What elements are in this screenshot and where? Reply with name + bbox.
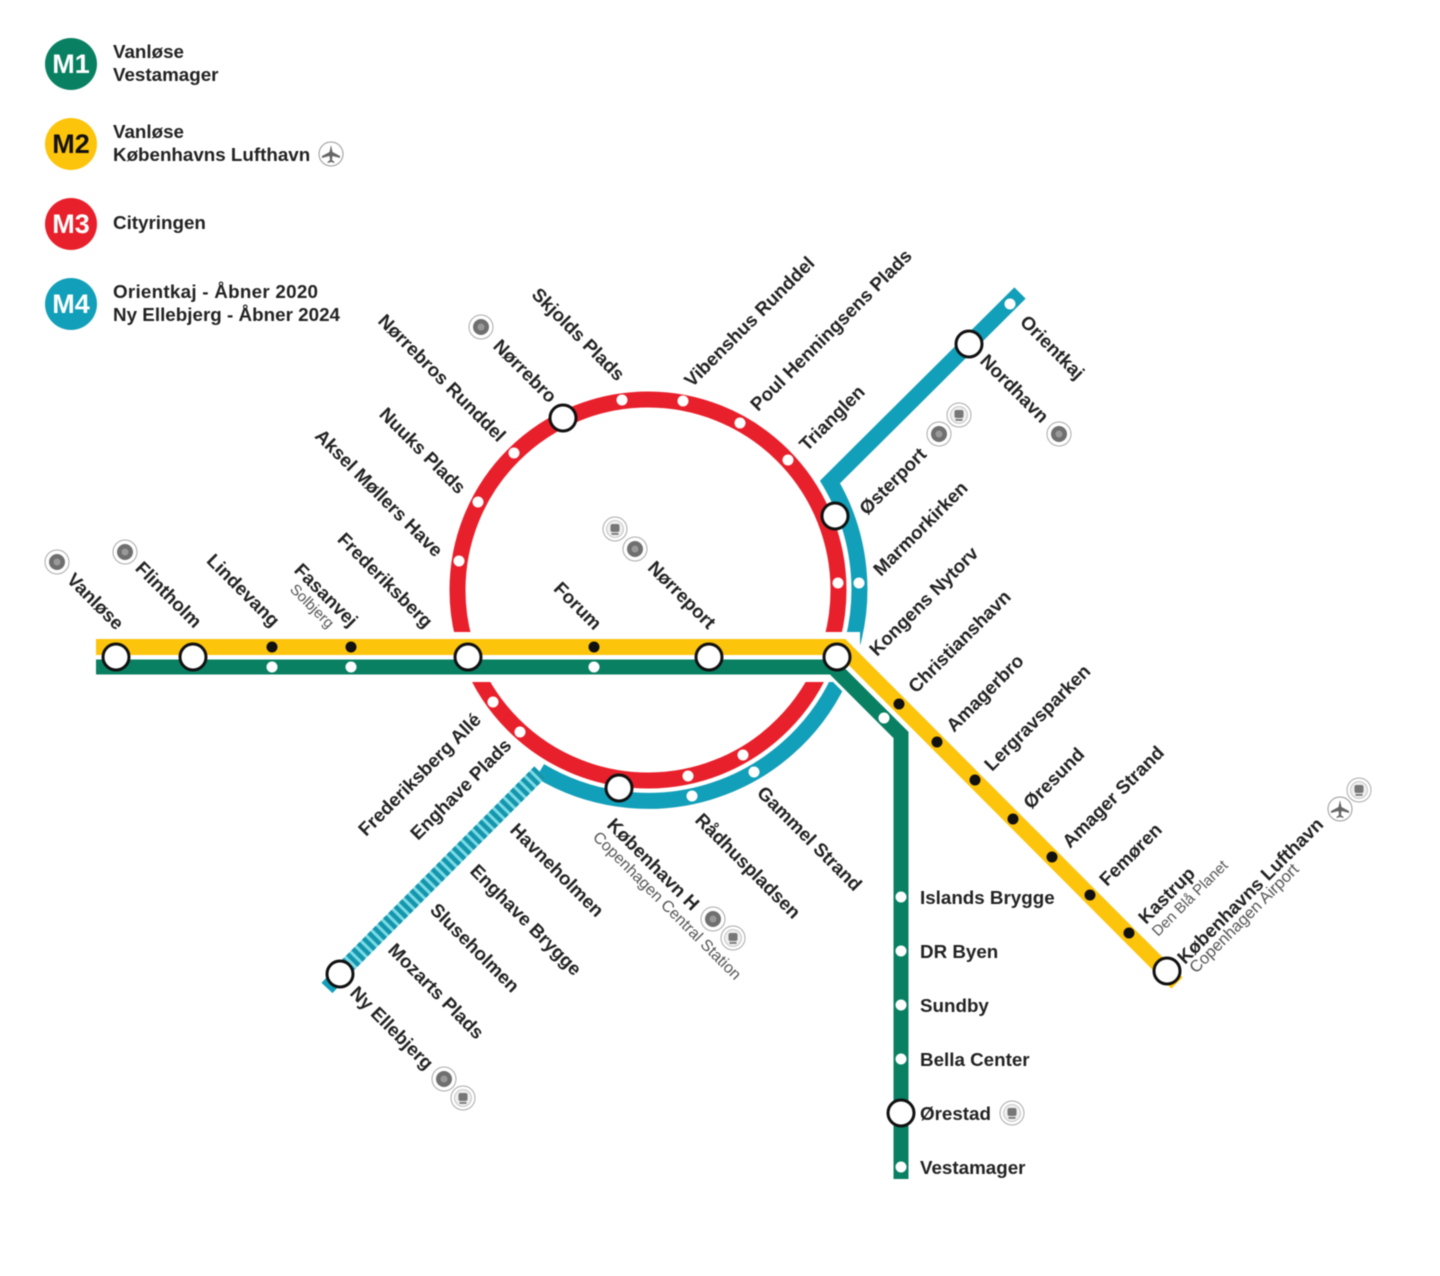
station labels: reading up-right: Christianshavn <box>904 586 1015 697</box>
station labels: reading up-right: Amagerbro <box>942 650 1028 736</box>
station labels: M1 south branch: Bella Center <box>920 1049 1030 1070</box>
station labels: reading up-right: Lergravsparken <box>980 660 1094 775</box>
legend: M2: Københavns Lufthavn <box>113 144 310 165</box>
station labels: west and north, reading down-right: Lindevang <box>203 550 284 631</box>
legend: M1: Vanløse <box>113 41 184 62</box>
station labels: reading up-right: Kongens Nytorv <box>865 542 983 660</box>
line M2 <box>96 647 1177 983</box>
station labels: reading up-right: Enghave Plads <box>406 735 515 844</box>
station labels: reading up-right: Vibenshus Runddel <box>680 252 819 391</box>
station labels: south and north-east, reading down-right: Sluseholmen <box>426 899 524 996</box>
station labels: south and north-east, reading down-right: Mozarts Plads <box>384 939 488 1043</box>
line M1 and M2 white casing <box>440 632 860 682</box>
legend: M1: Vestamager <box>113 64 219 85</box>
station labels: M1 south branch <box>920 887 1055 1178</box>
legend: M4: M4 <box>52 289 90 319</box>
interchange stations <box>103 331 1180 1126</box>
legend <box>45 38 343 330</box>
station labels: reading up-right <box>354 245 1327 977</box>
station labels: reading up-right: Kastrup <box>1134 863 1199 928</box>
station labels: M1 south branch: Ørestad <box>920 1103 991 1124</box>
station labels: south and north-east, reading down-right <box>346 311 1089 1074</box>
station labels: south and north-east, reading down-right: Orientkaj <box>1016 311 1089 383</box>
legend: M1 <box>45 38 219 90</box>
line M3 ring <box>458 400 838 780</box>
station labels: reading up-right: Den Blå Planet <box>1149 856 1232 940</box>
station labels: west and north, reading down-right: Forum <box>550 578 606 634</box>
legend: M3: M3 <box>52 209 90 239</box>
station labels: reading up-right: Poul Henningsens Plads <box>746 245 916 415</box>
line M4 north branch <box>830 293 1020 645</box>
station labels: south and north-east, reading down-right: Ny Ellebjerg <box>346 982 438 1074</box>
station labels: M1 south branch: Islands Brygge <box>920 887 1055 908</box>
station labels: west and north, reading down-right: Aksel Møllers Have <box>311 425 447 561</box>
legend: M1: M1 <box>52 49 90 79</box>
station labels: west and north, reading down-right: Nørrebro <box>489 335 561 407</box>
station labels: west and north, reading down-right: Flintholm <box>131 557 206 632</box>
legend: M4: Orientkaj - Åbner 2020 <box>113 281 318 302</box>
line M1 <box>96 667 901 1179</box>
station labels: reading up-right: Marmorkirken <box>869 477 972 580</box>
station labels: M1 south branch: DR Byen <box>920 941 998 962</box>
transfer icons <box>45 315 1371 1125</box>
station labels: south and north-east, reading down-right: Copenhagen Central Station <box>589 829 744 984</box>
legend: M3: Cityringen <box>113 212 206 233</box>
legend: M4: Ny Ellebjerg - Åbner 2024 <box>113 304 341 325</box>
station labels: south and north-east, reading down-right: Havneholmen <box>506 819 608 921</box>
station labels: reading up-right: Frederiksberg Allé <box>354 709 485 840</box>
legend: M2 <box>45 118 343 170</box>
station labels: west and north, reading down-right: Solbjerg <box>286 581 337 632</box>
legend: M3 <box>45 198 206 250</box>
legend: M4 <box>45 278 341 330</box>
station labels: reading up-right: Østerport <box>855 443 931 519</box>
station labels: west and north, reading down-right: Frederiksberg <box>334 528 437 632</box>
station labels: reading up-right: Femøren <box>1095 819 1166 890</box>
station labels: west and north, reading down-right: Vanløse <box>63 569 128 634</box>
station labels: west and north, reading down-right: Nørrebros Runddel <box>374 310 510 446</box>
station labels: M1 south branch: Vestamager <box>920 1157 1026 1178</box>
station labels: west and north, reading down-right: Skjolds Plads <box>528 284 629 385</box>
station labels: reading up-right: Øresund <box>1019 743 1088 813</box>
station labels: M1 south branch: Sundby <box>920 995 989 1016</box>
line M4 section under construction <box>327 772 540 988</box>
station labels: reading up-right: Copenhagen Airport <box>1186 860 1303 977</box>
small stations <box>266 298 1016 1172</box>
station labels: reading up-right: Københavns Lufthavn <box>1173 814 1327 968</box>
M2 black stations <box>266 642 1134 938</box>
station labels: reading up-right: Trianglen <box>795 381 869 455</box>
station labels: west and north, reading down-right: Fasanvej <box>290 559 362 631</box>
station labels: west and north, reading down-right <box>63 284 721 634</box>
station labels: south and north-east, reading down-right: Gammel Strand <box>753 782 866 895</box>
station labels: west and north, reading down-right: Nuuks Plads <box>375 403 470 498</box>
station labels: west and north, reading down-right: Nørreport <box>644 557 721 633</box>
station labels: reading up-right: Amager Strand <box>1058 742 1168 852</box>
legend: M2: Vanløse <box>113 121 184 142</box>
station labels: south and north-east, reading down-right: København H <box>603 814 704 914</box>
station labels: south and north-east, reading down-right: Rådhuspladsen <box>691 809 805 923</box>
line M4 south arc <box>540 682 838 801</box>
station labels: south and north-east, reading down-right: Enghave Brygge <box>466 860 586 980</box>
station labels: south and north-east, reading down-right: Nordhavn <box>976 350 1053 427</box>
legend: M2: M2 <box>52 129 90 159</box>
